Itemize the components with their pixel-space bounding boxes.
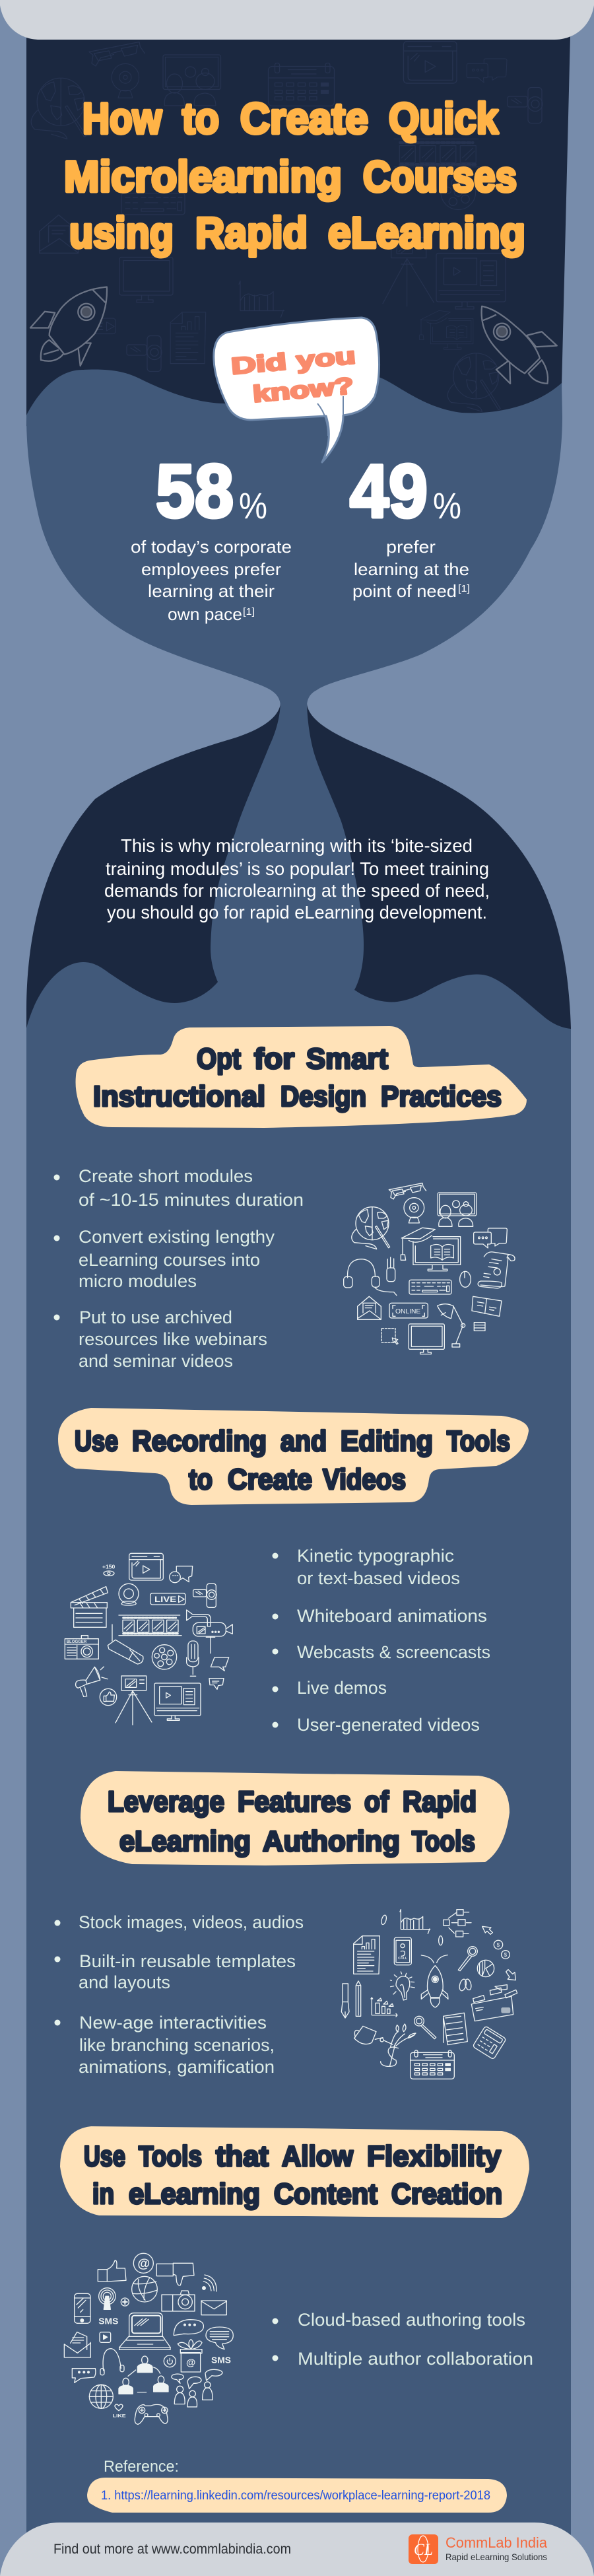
panel: blue main body and stem bbox=[26, 700, 571, 2576]
bullet list: instructional design: Put to use archived bbox=[79, 1307, 232, 1327]
stat: 58 percent: employees prefer bbox=[141, 559, 281, 579]
bullet list: flexibility tools bbox=[272, 2310, 533, 2369]
stat: 58 percent: own pace bbox=[168, 604, 242, 624]
title: How bbox=[82, 94, 162, 143]
bullet list: flexibility tools: Cloud-based authoring tools bbox=[298, 2310, 525, 2330]
bullet list: authoring tool features bbox=[54, 1912, 304, 2077]
bullet list: authoring tool features: animations, gamification bbox=[79, 2057, 275, 2077]
footer text: Find out more at www.commlabindia.com bbox=[53, 2542, 291, 2557]
bullet list: video tools: Live demos bbox=[297, 1678, 387, 1698]
title: Quick bbox=[389, 94, 498, 143]
title: Microlearning bbox=[64, 152, 342, 201]
top cap bbox=[0, 0, 594, 40]
text block: intro: training modules’ is so popular! To meet training bbox=[106, 858, 489, 879]
title: Courses bbox=[363, 152, 517, 201]
bullet list: authoring tool features: Stock images, videos, audios bbox=[79, 1912, 304, 1932]
heading banner: smart instructional design: Opt bbox=[197, 1043, 241, 1075]
icon cluster: collaboration tools bbox=[64, 2253, 233, 2424]
heading banner: rapid elearning features: Tools bbox=[412, 1825, 475, 1858]
heading banner: smart instructional design: Practices bbox=[381, 1080, 502, 1113]
heading banner: flexibility tools: Creation bbox=[391, 2178, 502, 2210]
stat: 58 percent bbox=[131, 450, 292, 624]
title: to bbox=[182, 94, 219, 143]
stat: 58 percent: [1] bbox=[243, 606, 255, 617]
logo: CommLab India: Rapid eLearning Solutions bbox=[446, 2552, 547, 2562]
icon cluster: collaboration tools: @ bbox=[186, 2358, 195, 2369]
title: Create bbox=[240, 94, 368, 143]
speech bubble: did you know bbox=[214, 318, 380, 462]
text block: intro: This is why microlearning with its ‘bite-sized bbox=[121, 835, 473, 856]
icon cluster: collaboration tools: @ bbox=[137, 2257, 150, 2271]
speech bubble: did you know: you bbox=[295, 343, 356, 374]
icon cluster: authoring tools: CALL bbox=[398, 1957, 407, 1961]
heading banner: recording and editing tools: Editing bbox=[341, 1425, 433, 1457]
icon cluster: authoring tools bbox=[341, 1910, 517, 2079]
stat: 58 percent: learning at their bbox=[148, 581, 275, 601]
icon cluster: authoring tools: $ bbox=[497, 1942, 500, 1948]
heading banner: flexibility tools: that bbox=[216, 2140, 269, 2173]
icon cluster: instructional design: ONLINE bbox=[395, 1308, 421, 1315]
title: eLearning bbox=[328, 208, 525, 257]
heading banner: rapid elearning features bbox=[81, 1771, 510, 1865]
heading banner: rapid elearning features: Features bbox=[238, 1786, 351, 1818]
heading banner: flexibility tools: in bbox=[92, 2178, 114, 2210]
bullet list: video tools: Whiteboard animations bbox=[297, 1606, 487, 1626]
bullet list: video tools: User-generated videos bbox=[297, 1715, 480, 1735]
speech bubble: did you know: Did bbox=[230, 349, 288, 380]
bullet list: flexibility tools: Multiple author collaboration bbox=[298, 2349, 533, 2369]
heading banner: smart instructional design: Instructional bbox=[93, 1080, 265, 1113]
bullet list: video tools: Kinetic typographic bbox=[297, 1546, 454, 1566]
icon cluster: collaboration tools: SMS bbox=[98, 2316, 118, 2326]
heading banner: rapid elearning features: of bbox=[364, 1786, 389, 1818]
logo: CommLab India: CL bbox=[414, 2541, 433, 2559]
bullet list: instructional design: micro modules bbox=[79, 1271, 197, 1291]
heading banner: recording and editing tools: Create bbox=[228, 1463, 312, 1496]
stat: 49 percent: prefer bbox=[386, 537, 436, 557]
stat: 49 percent: learning at the bbox=[354, 559, 469, 579]
footer cap bbox=[0, 2523, 594, 2576]
bullet list: authoring tool features: like branching scenarios, bbox=[79, 2035, 275, 2055]
stat: 58 percent: 58 bbox=[156, 450, 234, 534]
bullet list: video tools: or text-based videos bbox=[297, 1568, 460, 1588]
heading banner: rapid elearning features: Authoring bbox=[263, 1825, 400, 1858]
heading banner: flexibility tools: Flexibility bbox=[367, 2140, 502, 2173]
faint doodle pattern bbox=[31, 42, 543, 411]
logo: CommLab India: CommLab India bbox=[446, 2534, 548, 2551]
text block: intro bbox=[104, 835, 490, 922]
reference link bbox=[87, 2478, 507, 2513]
heading banner: recording and editing tools: Tools bbox=[447, 1425, 510, 1457]
heading banner: smart instructional design bbox=[76, 1026, 527, 1128]
stat: 58 percent: of today’s corporate bbox=[131, 537, 292, 557]
heading banner: recording and editing tools bbox=[58, 1408, 529, 1505]
heading banner: flexibility tools: Content bbox=[274, 2178, 378, 2210]
stat: 49 percent: % bbox=[433, 485, 461, 526]
bullet list: video tools bbox=[272, 1546, 490, 1735]
heading banner: recording and editing tools: to bbox=[189, 1463, 213, 1496]
bullet list: instructional design: Create short modules bbox=[79, 1166, 253, 1186]
heading banner: recording and editing tools: Use bbox=[75, 1425, 118, 1457]
bullet list: instructional design: of ~10-15 minutes duration bbox=[79, 1190, 304, 1210]
heading banner: recording and editing tools: Videos bbox=[323, 1463, 406, 1496]
bullet list: authoring tool features: New-age interactivities bbox=[79, 2013, 267, 2033]
heading banner: rapid elearning features: eLearning bbox=[119, 1825, 251, 1858]
heading banner: recording and editing tools: Recording bbox=[132, 1425, 267, 1457]
panel: dark top flask bbox=[26, 36, 570, 426]
heading banner: flexibility tools bbox=[60, 2126, 529, 2218]
icon cluster: authoring tools: $ bbox=[504, 1952, 508, 1958]
icon: left rocket bbox=[30, 287, 107, 366]
heading banner: rapid elearning features: Leverage bbox=[108, 1786, 224, 1818]
heading banner: flexibility tools: eLearning bbox=[129, 2178, 260, 2210]
bullet list: instructional design: Convert existing lengthy bbox=[79, 1227, 275, 1247]
title bbox=[64, 94, 525, 257]
bullet list: instructional design: resources like webinars bbox=[79, 1329, 267, 1349]
icon cluster: video tools: +150 bbox=[102, 1564, 116, 1570]
panel: dark lower flask bbox=[26, 704, 571, 1030]
heading banner: flexibility tools: Tools bbox=[139, 2140, 202, 2173]
heading banner: smart instructional design: for bbox=[254, 1043, 294, 1075]
icon cluster: collaboration tools: LIKE bbox=[113, 2414, 126, 2419]
icon cluster: collaboration tools: SMS bbox=[211, 2355, 231, 2365]
icon cluster: video tools bbox=[65, 1553, 232, 1725]
text block: intro: demands for microlearning at the speed of need, bbox=[104, 880, 490, 901]
logo: CommLab India bbox=[409, 2534, 548, 2564]
bullet list: authoring tool features: Built-in reusable templates bbox=[79, 1951, 296, 1971]
stat: 49 percent: point of need bbox=[352, 581, 457, 601]
stat: 49 percent: [1] bbox=[458, 583, 470, 594]
icon: right rocket bbox=[482, 306, 557, 384]
stat: 49 percent: 49 bbox=[350, 450, 428, 534]
icon cluster: instructional design bbox=[344, 1183, 515, 1354]
text block: intro: you should go for rapid eLearning development. bbox=[107, 902, 487, 922]
reference label: Reference: bbox=[104, 2458, 179, 2476]
heading banner: rapid elearning features: Rapid bbox=[403, 1786, 477, 1818]
title: Rapid bbox=[195, 208, 308, 257]
heading banner: smart instructional design: Smart bbox=[306, 1043, 388, 1075]
stat: 58 percent: % bbox=[239, 485, 267, 526]
heading banner: smart instructional design: Design bbox=[280, 1080, 366, 1113]
heading banner: flexibility tools: Use bbox=[84, 2140, 125, 2173]
panel: blue upper flask bbox=[26, 370, 562, 707]
bullet list: video tools: Webcasts & screencasts bbox=[297, 1642, 490, 1662]
reference link: 1. https://learning.linkedin.com/resources/workplace-learning-report-2018 bbox=[101, 2489, 490, 2503]
bullet list: instructional design bbox=[54, 1166, 304, 1371]
bullet list: instructional design: and seminar videos bbox=[79, 1351, 233, 1371]
speech bubble: did you know: know? bbox=[251, 373, 354, 407]
bullet list: instructional design: eLearning courses into bbox=[79, 1250, 260, 1270]
stat: 49 percent bbox=[350, 450, 470, 601]
bullet list: authoring tool features: and layouts bbox=[79, 1972, 170, 1992]
title: using bbox=[69, 208, 174, 257]
heading banner: flexibility tools: Allow bbox=[282, 2140, 354, 2173]
heading banner: recording and editing tools: and bbox=[280, 1425, 327, 1457]
